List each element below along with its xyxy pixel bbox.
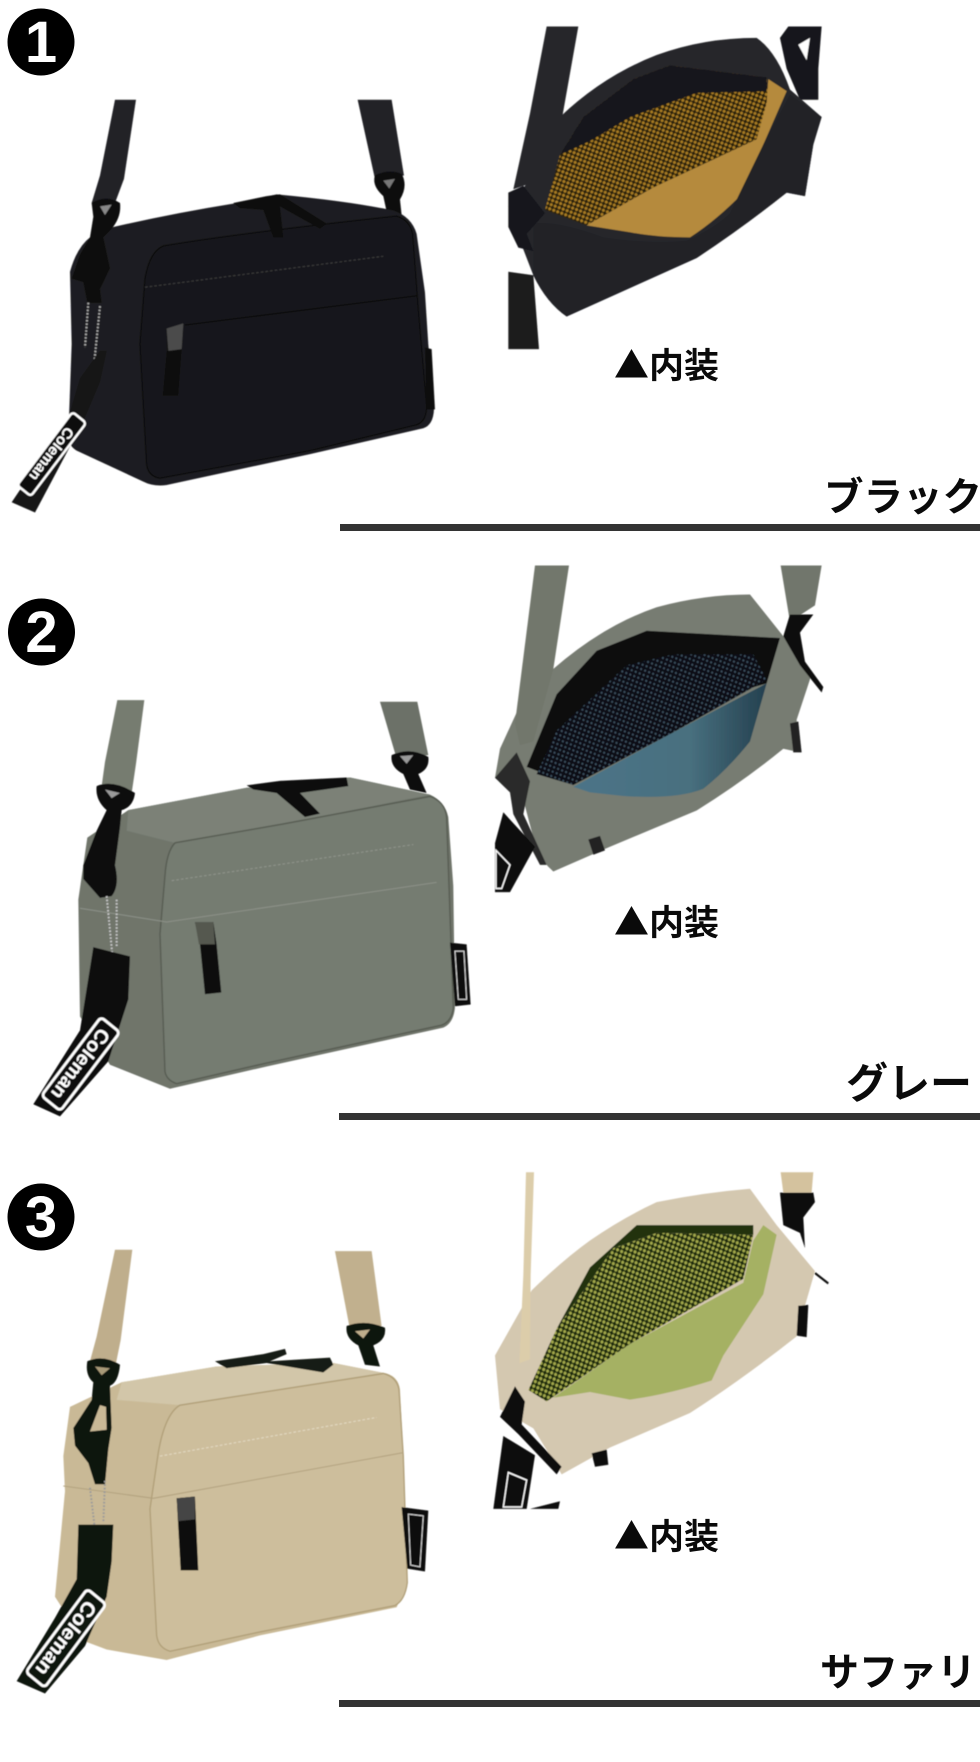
mesh pocket xyxy=(537,654,767,785)
colour name: grey: グレー xyxy=(846,1050,972,1111)
divider rule 1 xyxy=(340,524,980,531)
side label xyxy=(425,347,435,409)
colour name: safari: サファリ xyxy=(820,1642,976,1698)
bag body xyxy=(55,1363,407,1660)
right strap xyxy=(781,1172,813,1193)
side label xyxy=(797,1305,808,1337)
left strap xyxy=(519,1172,534,1363)
front panel xyxy=(150,1373,407,1651)
right strap and clip xyxy=(780,26,822,100)
shoulder strap xyxy=(513,26,578,189)
mesh pocket xyxy=(528,1233,753,1402)
product photo: grey bag xyxy=(33,700,471,1116)
Coleman tag: Coleman xyxy=(26,423,76,484)
Coleman tag: Coleman xyxy=(46,1023,114,1104)
pocket seam and stitching xyxy=(145,256,417,325)
strap hardware right xyxy=(374,172,405,215)
left buckle xyxy=(500,1386,562,1474)
pocket zipper pull xyxy=(195,922,221,994)
label: interior: ▲内装 xyxy=(614,895,719,946)
bag shell xyxy=(495,1189,815,1474)
divider rule 3 xyxy=(339,1700,980,1707)
left strap xyxy=(515,565,569,745)
interior photo: safari bag xyxy=(493,1172,828,1509)
bag shell xyxy=(508,38,822,316)
top panel xyxy=(127,777,430,843)
hanging tag xyxy=(495,812,535,892)
ball chain xyxy=(90,1481,105,1544)
hanging tag xyxy=(493,1436,560,1509)
interior photo: grey bag xyxy=(495,565,823,892)
strap hardware left xyxy=(72,199,120,303)
main zipper pull xyxy=(233,194,327,237)
front flap xyxy=(533,95,822,316)
strap hardware right xyxy=(346,1323,385,1366)
label: interior: ▲内装 xyxy=(614,338,719,389)
number badge 1: 1 xyxy=(25,10,57,75)
bag body xyxy=(68,194,434,485)
strap hardware right xyxy=(391,751,428,793)
label: interior: ▲内装 xyxy=(614,1509,719,1560)
product photo: safari bag xyxy=(17,1250,428,1693)
number badge 1 xyxy=(8,8,74,76)
side label xyxy=(450,943,471,1006)
ball chain xyxy=(85,303,100,372)
number badge 2: 2 xyxy=(25,600,58,665)
bag body xyxy=(78,777,455,1089)
blue lining xyxy=(573,683,767,797)
interior photo: black bag xyxy=(508,26,822,349)
pocket pull xyxy=(592,1449,608,1467)
main zipper pull xyxy=(215,1349,333,1372)
zipper band xyxy=(557,1225,753,1329)
colour name: black: ブラック xyxy=(824,466,980,523)
front panel xyxy=(160,796,453,1084)
side label xyxy=(402,1507,428,1571)
zipper band xyxy=(560,65,767,155)
hanging tag strap xyxy=(508,272,539,349)
strap hardware left xyxy=(83,784,135,898)
Coleman tag xyxy=(12,351,107,513)
front panel xyxy=(140,216,427,478)
buckle xyxy=(508,186,545,251)
ball chain xyxy=(107,896,117,965)
pocket seam and stitching xyxy=(80,845,437,922)
pocket seam and stitching xyxy=(63,1417,403,1498)
top panel xyxy=(117,1363,387,1405)
mesh pocket xyxy=(545,65,768,225)
bag shell xyxy=(495,594,812,871)
side label xyxy=(790,722,802,752)
buckle xyxy=(495,752,547,865)
shoulder straps xyxy=(90,1250,132,1368)
cord xyxy=(815,1273,828,1283)
number badge 2 xyxy=(8,598,75,666)
mustard lining xyxy=(587,79,787,237)
pocket zipper pull xyxy=(163,323,183,396)
strap hardware left xyxy=(73,1358,120,1484)
right strap clip xyxy=(780,1193,815,1248)
product photo: black bag xyxy=(12,100,435,513)
pocket pull xyxy=(588,836,605,855)
Coleman tag xyxy=(33,947,130,1116)
main zipper pull xyxy=(247,777,348,817)
right strap xyxy=(781,565,822,622)
number badge 3: 3 xyxy=(25,1185,57,1250)
strap hardware xyxy=(783,614,823,692)
dark interior xyxy=(527,631,780,785)
olive lining xyxy=(553,1225,777,1400)
Coleman tag: Coleman xyxy=(31,1596,101,1680)
shoulder straps xyxy=(102,700,144,793)
number badge 3 xyxy=(8,1184,74,1250)
Coleman tag xyxy=(17,1525,113,1693)
pocket zipper pull xyxy=(177,1497,198,1570)
shoulder straps xyxy=(92,100,404,203)
divider rule 2 xyxy=(339,1113,980,1120)
